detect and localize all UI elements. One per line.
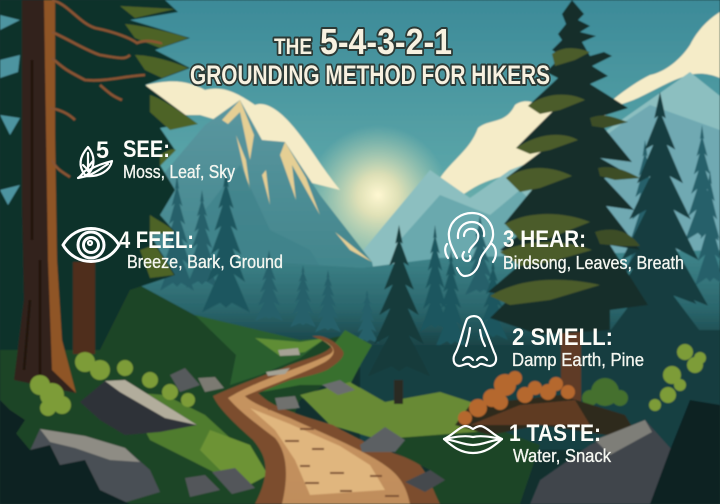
item: 2 smell [454, 316, 644, 370]
label: hear: 3 HEAR: [503, 226, 586, 253]
icon: ear [445, 213, 496, 276]
icon: lips [444, 426, 502, 453]
clouds [146, 12, 720, 215]
orange shrub [455, 371, 640, 440]
icon: leaves [78, 147, 112, 178]
main mountain [150, 100, 380, 300]
title [190, 21, 550, 90]
label: taste: Water, Snack [513, 445, 612, 466]
icon: eye [63, 228, 119, 262]
right dark fir tree [560, 92, 720, 400]
centre fir tree [368, 225, 430, 404]
label: see: Moss, Leaf, Sky [123, 161, 236, 182]
item: 1 taste [444, 420, 612, 466]
title: THE [274, 34, 312, 59]
label: feel [119, 227, 283, 272]
label: see [96, 136, 236, 182]
left big pine trunk [14, 0, 162, 393]
label: taste: 1 TASTE: [509, 420, 601, 447]
boulders [28, 348, 680, 504]
title: 5-4-3-2-1 [320, 21, 452, 62]
left big pine foliage [0, 0, 198, 350]
icon: nose [454, 316, 496, 367]
label: feel: 4 FEEL: [119, 227, 194, 254]
distant mountains [355, 72, 720, 300]
label: smell: 2 SMELL: [512, 324, 613, 351]
item: 3 hear [445, 213, 684, 276]
winding trail [213, 336, 440, 504]
right dark forest floor [360, 345, 720, 450]
label: see: 5 [96, 137, 109, 164]
item: 5 see [78, 136, 236, 182]
item: 4 feel [63, 227, 283, 272]
label: smell: Damp Earth, Pine [512, 349, 644, 370]
label: hear: Birdsong, Leaves, Breath [503, 252, 684, 273]
label: smell [512, 324, 644, 370]
foreground dark foliage [0, 400, 720, 504]
label: taste [509, 420, 612, 466]
yellow-green shrubs [30, 344, 706, 416]
right big fir tree [488, 0, 648, 410]
label: see: SEE: [123, 136, 170, 163]
title: GROUNDING METHOD FOR HIKERS [190, 60, 550, 90]
sky background [0, 0, 720, 340]
label: hear [503, 226, 684, 273]
distant forest [100, 125, 720, 350]
ground [0, 280, 540, 504]
label: feel: Breeze, Bark, Ground [127, 251, 283, 272]
second trunk [73, 262, 95, 354]
